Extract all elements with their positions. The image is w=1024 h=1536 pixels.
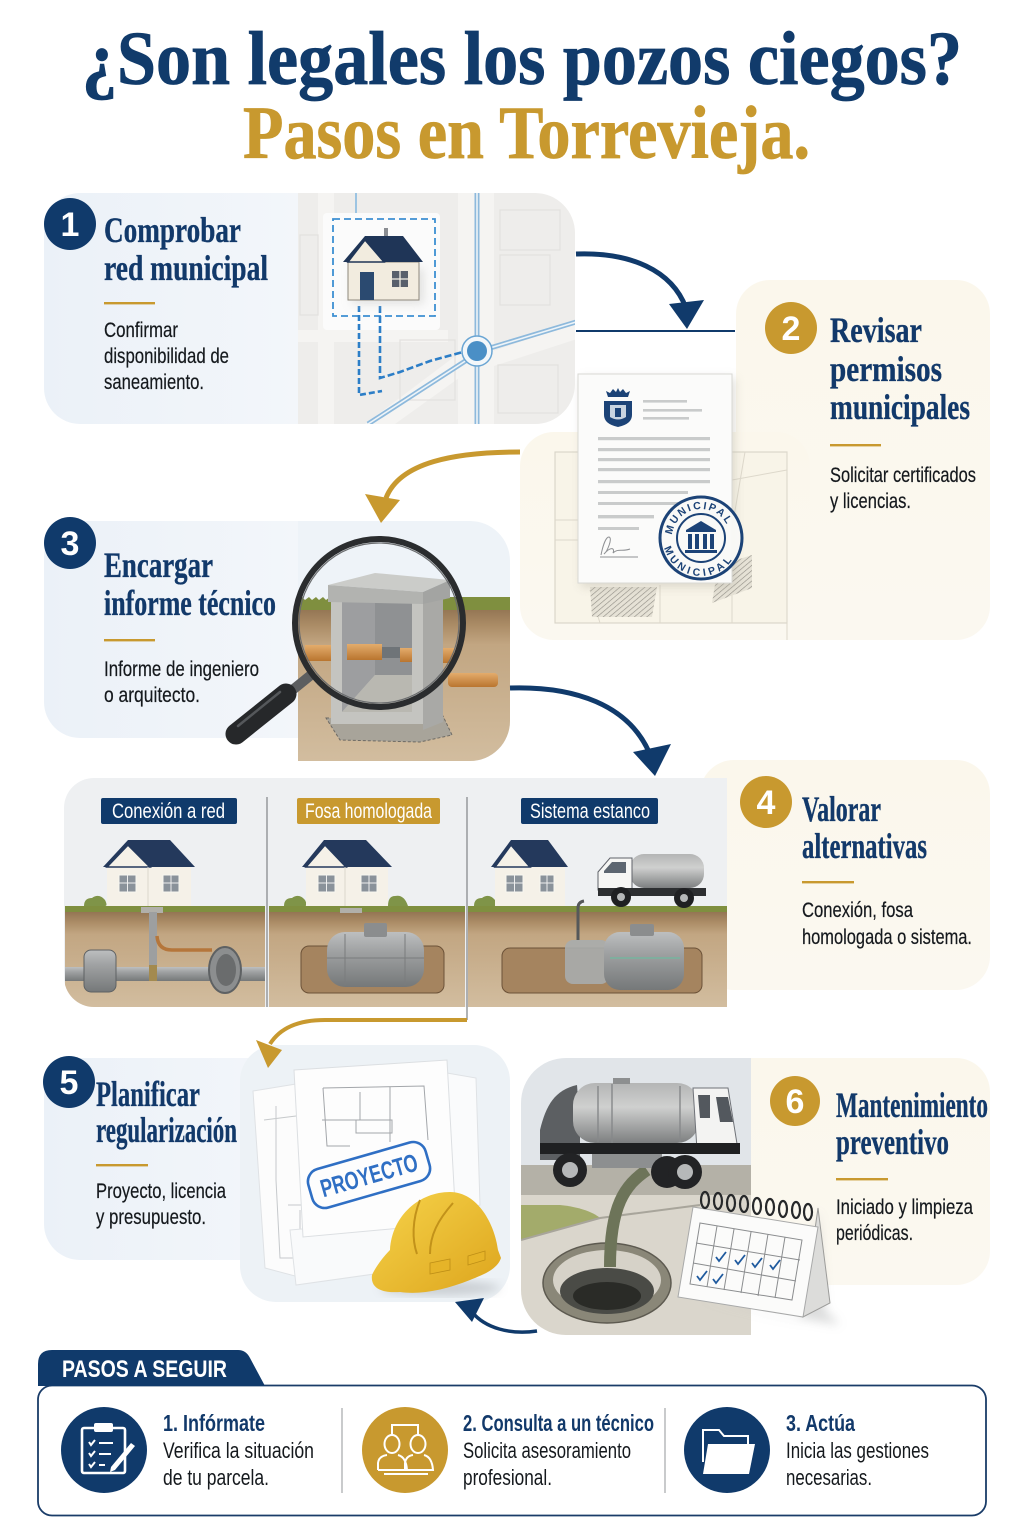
heading 1 bbox=[104, 210, 268, 288]
option 1: conexion a red bbox=[65, 840, 265, 1007]
text: informate bbox=[163, 1410, 314, 1490]
text 6 bbox=[836, 1196, 973, 1245]
tag sistema estanco: Sistema estanco bbox=[530, 800, 650, 823]
heading 4: Valorar bbox=[802, 789, 881, 829]
step: actua bbox=[684, 1407, 929, 1493]
icon: tanker truck bbox=[598, 854, 706, 908]
title: ¿Son legales los pozos ciegos? bbox=[82, 17, 962, 101]
heading 2: Revisar bbox=[830, 310, 922, 350]
text 5 bbox=[96, 1180, 226, 1229]
number badge 3: 3 bbox=[61, 525, 79, 563]
icon: municipal stamp: MUNICIPAL bbox=[664, 546, 732, 576]
icon: magnifying glass bbox=[236, 539, 463, 734]
text: informate: 1. Infórmate bbox=[163, 1410, 265, 1436]
heading 2 bbox=[830, 310, 970, 427]
text: consulta: profesional. bbox=[463, 1465, 552, 1490]
text: informate: de tu parcela. bbox=[163, 1465, 269, 1490]
step: informate bbox=[61, 1407, 314, 1493]
stamp: proyecto: PROYECTO bbox=[317, 1149, 421, 1203]
heading 5 bbox=[96, 1074, 237, 1150]
heading 1: red municipal bbox=[104, 248, 268, 288]
heading 4: alternativas bbox=[802, 826, 927, 866]
title: Pasos en Torrevieja. bbox=[243, 92, 810, 175]
text 5: y presupuesto. bbox=[96, 1206, 206, 1229]
text 3: Informe de ingeniero bbox=[104, 658, 259, 681]
icon: folder bbox=[684, 1407, 770, 1493]
number badge 6 bbox=[770, 1076, 820, 1126]
number badge 3 bbox=[44, 517, 96, 569]
tag fosa homologada: Fosa homologada bbox=[305, 800, 432, 823]
stamp: proyecto bbox=[305, 1139, 433, 1211]
title bbox=[82, 17, 962, 175]
text 2 bbox=[830, 464, 976, 513]
panel: pasos a seguir bbox=[38, 1350, 986, 1516]
step: consulta bbox=[362, 1407, 654, 1493]
vacuum truck bbox=[540, 1078, 740, 1189]
step 2 text bbox=[765, 302, 976, 513]
number badge 6: 6 bbox=[786, 1083, 804, 1121]
text 2: y licencias. bbox=[830, 490, 911, 513]
heading 3: Encargar bbox=[104, 545, 213, 585]
panel: step 6 mantenimiento preventivo bbox=[521, 1058, 990, 1335]
tag conexion a red: Conexión a red bbox=[112, 800, 225, 823]
illustration: street map with house bbox=[298, 193, 580, 425]
text 6: periódicas. bbox=[836, 1222, 913, 1245]
illustration: septic pit under magnifier bbox=[236, 521, 510, 761]
text 6: Iniciado y limpieza bbox=[836, 1196, 973, 1219]
icon: coat of arms bbox=[604, 388, 632, 427]
text 2: Solicitar certificados bbox=[830, 464, 976, 487]
panel: step 5 planificar regularizacion bbox=[43, 1045, 510, 1302]
text 3: o arquitecto. bbox=[104, 684, 200, 707]
text: consulta: 2. Consulta a un técnico bbox=[463, 1410, 654, 1436]
number badge 1: 1 bbox=[61, 206, 79, 244]
option 2: fosa homologada bbox=[269, 840, 465, 1007]
heading 6 bbox=[836, 1085, 988, 1162]
house 2 bbox=[302, 840, 392, 906]
text 1 bbox=[104, 319, 229, 394]
tag fosa homologada bbox=[297, 798, 440, 824]
text: informate: Verifica la situación bbox=[163, 1438, 314, 1463]
option 3: sistema estanco bbox=[468, 840, 727, 1007]
icon: municipal stamp bbox=[658, 496, 744, 580]
text 1: disponibilidad de bbox=[104, 345, 229, 368]
panel: step 2 revisar permisos bbox=[520, 280, 990, 640]
text: actua bbox=[786, 1410, 929, 1490]
illustration: municipal permit document bbox=[554, 374, 788, 640]
arrow 1 to 2 bbox=[576, 254, 735, 331]
heading 1: Comprobar bbox=[104, 210, 241, 250]
heading 3 bbox=[104, 545, 276, 623]
illustration: vacuum truck, manhole and calendar bbox=[521, 1058, 840, 1335]
icon: two advisors bbox=[362, 1407, 448, 1493]
panel: step 1 comprobar red municipal bbox=[44, 193, 580, 425]
heading 3: informe técnico bbox=[104, 583, 276, 623]
number badge 4 bbox=[740, 776, 792, 828]
heading 6: preventivo bbox=[836, 1122, 949, 1162]
text 4 bbox=[802, 899, 972, 949]
heading 2: permisos bbox=[830, 349, 942, 389]
text: consulta bbox=[463, 1410, 654, 1490]
icon: yellow hard hat bbox=[372, 1192, 501, 1295]
icon: pipe connection bbox=[359, 306, 382, 395]
text 4: homologada o sistema. bbox=[802, 926, 972, 949]
icon: municipal stamp: MUNICIPAL bbox=[664, 502, 730, 534]
house 3 bbox=[491, 840, 568, 906]
heading 5: regularización bbox=[96, 1110, 237, 1150]
text: actua: Inicia las gestiones bbox=[786, 1438, 929, 1463]
arrow 3 to 4 bbox=[510, 688, 671, 776]
signature bbox=[600, 537, 638, 557]
panel: step 3 encargar informe tecnico bbox=[44, 517, 510, 761]
text 1: Confirmar bbox=[104, 319, 178, 342]
number badge 2: 2 bbox=[782, 310, 800, 348]
arrow 2 to 3 bbox=[365, 452, 520, 523]
illustration: plans, stamp and helmet bbox=[253, 1060, 501, 1295]
heading 2: municipales bbox=[830, 387, 970, 427]
pit walls bbox=[423, 598, 443, 730]
text 1: saneamiento. bbox=[104, 371, 204, 394]
arrow 4 to 5 bbox=[256, 1020, 467, 1068]
text 3 bbox=[104, 658, 259, 707]
icon: clipboard bbox=[61, 1407, 147, 1493]
separators bbox=[267, 797, 467, 1020]
heading 4 bbox=[802, 789, 927, 866]
tab heading: PASOS A SEGUIR bbox=[62, 1356, 227, 1383]
house 1 bbox=[103, 840, 195, 906]
manhole bbox=[543, 1243, 671, 1323]
panel: step 4 valorar alternativas bbox=[64, 760, 990, 1020]
arrow 6 to 5 bbox=[455, 1298, 537, 1332]
icon: house bbox=[343, 228, 424, 304]
number badge 4: 4 bbox=[757, 784, 776, 822]
number badge 5 bbox=[43, 1056, 95, 1108]
number badge 2 bbox=[765, 302, 817, 354]
tab heading bbox=[38, 1350, 265, 1386]
text: actua: necesarias. bbox=[786, 1465, 872, 1490]
text 5: Proyecto, licencia bbox=[96, 1180, 226, 1203]
icon: calendar bbox=[678, 1192, 840, 1325]
number badge 5: 5 bbox=[60, 1064, 78, 1102]
text: consulta: Solicita asesoramiento bbox=[463, 1438, 631, 1463]
number badge 1 bbox=[44, 198, 96, 250]
heading 5: Planificar bbox=[96, 1074, 200, 1114]
text 4: Conexión, fosa bbox=[802, 899, 913, 922]
text: actua: 3. Actúa bbox=[786, 1410, 855, 1436]
